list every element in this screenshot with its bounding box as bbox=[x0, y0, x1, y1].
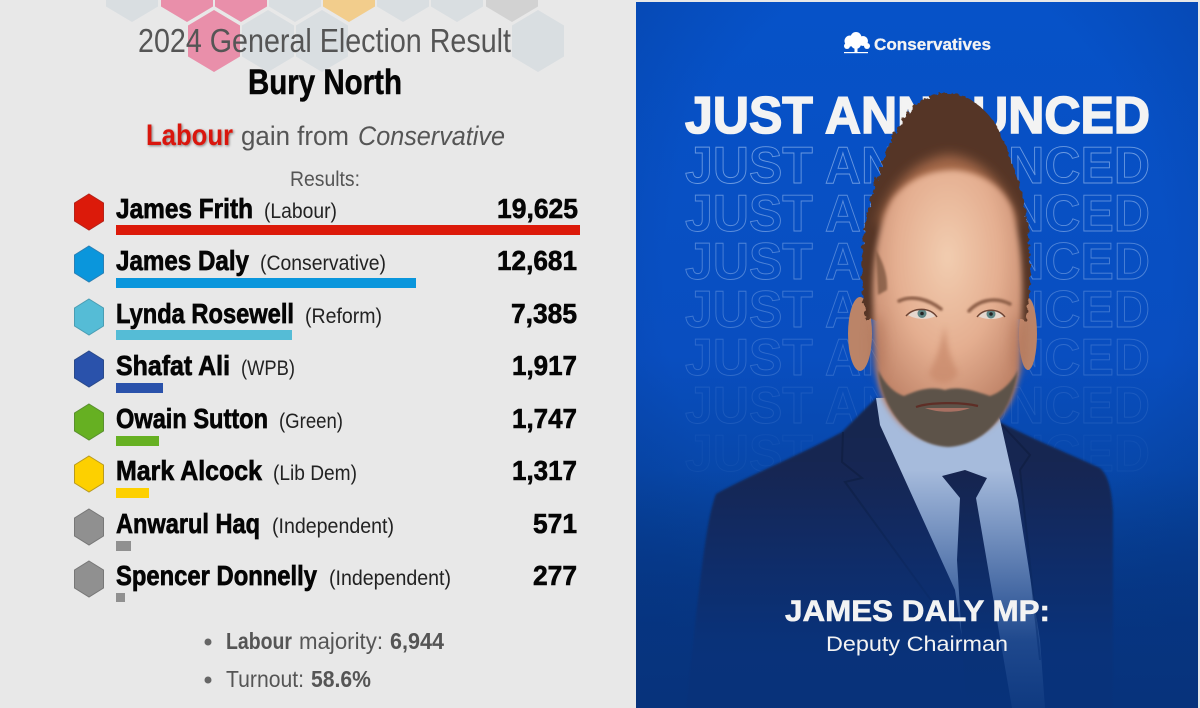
eyes bbox=[906, 309, 1005, 319]
hair seam on forehead bbox=[876, 250, 887, 295]
result summary: Labour bbox=[146, 119, 233, 152]
role caption: Deputy Chairman bbox=[826, 633, 1008, 656]
repeated outline headlines: JUST ANNOUNCED bbox=[685, 137, 1150, 195]
mouth bbox=[916, 403, 978, 412]
repeated outline headlines: JUST ANNOUNCED bbox=[685, 233, 1150, 291]
repeated outline headlines: JUST ANNOUNCED bbox=[685, 329, 1150, 387]
row: Owain Sutton: 1,747 bbox=[512, 403, 577, 434]
row: Anwarul Haq bbox=[74, 508, 577, 551]
result summary: Conservative bbox=[358, 121, 505, 151]
row: Lynda Rosewell: Lynda Rosewell bbox=[116, 298, 294, 329]
bottom fade over suit bbox=[636, 470, 1198, 708]
stat: majority bbox=[204, 628, 444, 654]
row: Anwarul Haq: (Independent) bbox=[272, 515, 394, 538]
repeated outline headlines bbox=[685, 137, 1150, 483]
hexagon background pattern bbox=[106, 0, 564, 72]
repeated outline headlines: JUST ANNOUNCED bbox=[685, 281, 1150, 339]
row: James Frith: James Frith bbox=[116, 193, 253, 224]
stat: turnout bbox=[204, 666, 371, 692]
repeated outline headlines: JUST ANNOUNCED bbox=[685, 425, 1150, 483]
shirt bbox=[876, 395, 1045, 708]
row: James Daly: 12,681 bbox=[497, 245, 577, 276]
title: 2024 General Election Result bbox=[138, 22, 511, 59]
logo: Conservatives bbox=[844, 32, 991, 54]
row: Lynda Rosewell bbox=[74, 298, 577, 340]
hairline shading bbox=[878, 155, 1018, 225]
row: Mark Alcock: (Lib Dem) bbox=[273, 462, 357, 485]
nose bbox=[930, 331, 958, 382]
result summary bbox=[146, 119, 505, 152]
row: Shafat Ali: (WPB) bbox=[241, 357, 295, 380]
row: Owain Sutton bbox=[74, 403, 577, 446]
stat: majority: 6,944 bbox=[390, 628, 444, 654]
row: Anwarul Haq: 571 bbox=[533, 508, 577, 539]
panel: announcement poster bbox=[636, 0, 1200, 708]
beard bbox=[878, 370, 1018, 447]
row: Lynda Rosewell: 7,385 bbox=[511, 298, 577, 329]
results label: Results: bbox=[290, 168, 360, 191]
row: Mark Alcock: Mark Alcock bbox=[116, 455, 262, 486]
row: James Frith bbox=[74, 193, 580, 235]
stat: turnout: Turnout: bbox=[226, 666, 304, 692]
portrait: man in suit bbox=[636, 93, 1198, 708]
jacket bbox=[696, 396, 1114, 636]
hair bbox=[862, 93, 1030, 320]
icon: oak tree bbox=[844, 32, 870, 53]
stat: majority: majority: bbox=[299, 628, 383, 654]
row: James Frith: 19,625 bbox=[497, 193, 578, 224]
ears bbox=[848, 297, 1037, 371]
stat: majority: Labour bbox=[226, 628, 292, 654]
row: James Daly bbox=[74, 245, 577, 288]
row: Mark Alcock: 1,317 bbox=[512, 455, 577, 486]
row: Spencer Donnelly bbox=[74, 560, 577, 602]
row: Shafat Ali bbox=[74, 350, 577, 393]
row: Shafat Ali: 1,917 bbox=[512, 350, 577, 381]
row: James Daly: James Daly bbox=[116, 245, 249, 276]
brows bbox=[899, 298, 1010, 311]
row: Mark Alcock bbox=[74, 455, 577, 498]
panel: election results bbox=[0, 0, 636, 708]
row: Lynda Rosewell: (Reform) bbox=[305, 305, 382, 328]
lapels bbox=[842, 425, 1040, 660]
row: Shafat Ali: Shafat Ali bbox=[116, 350, 230, 381]
row: Anwarul Haq: Anwarul Haq bbox=[116, 508, 260, 539]
constituency heading: Bury North bbox=[248, 63, 402, 102]
row: Spencer Donnelly: (Independent) bbox=[329, 567, 451, 590]
row: Owain Sutton: Owain Sutton bbox=[116, 403, 268, 434]
face bbox=[873, 170, 1022, 442]
name caption: JAMES DALY MP: bbox=[785, 595, 1050, 628]
logo: Conservatives: Conservatives bbox=[874, 35, 991, 54]
row: James Daly: (Conservative) bbox=[260, 252, 386, 275]
row: Spencer Donnelly: 277 bbox=[533, 560, 577, 591]
headline: JUST ANNOUNCED bbox=[685, 87, 1150, 145]
lower face shading bbox=[872, 315, 1024, 375]
row: James Frith: (Labour) bbox=[264, 200, 337, 223]
repeated outline headlines: JUST ANNOUNCED bbox=[685, 377, 1150, 435]
tie bbox=[942, 470, 1012, 708]
repeated outline headlines: JUST ANNOUNCED bbox=[685, 185, 1150, 243]
row: Spencer Donnelly: Spencer Donnelly bbox=[116, 560, 317, 591]
result summary: gain from bbox=[241, 121, 349, 151]
row: Owain Sutton: (Green) bbox=[279, 410, 343, 433]
stat: turnout: 58.6% bbox=[311, 666, 371, 692]
